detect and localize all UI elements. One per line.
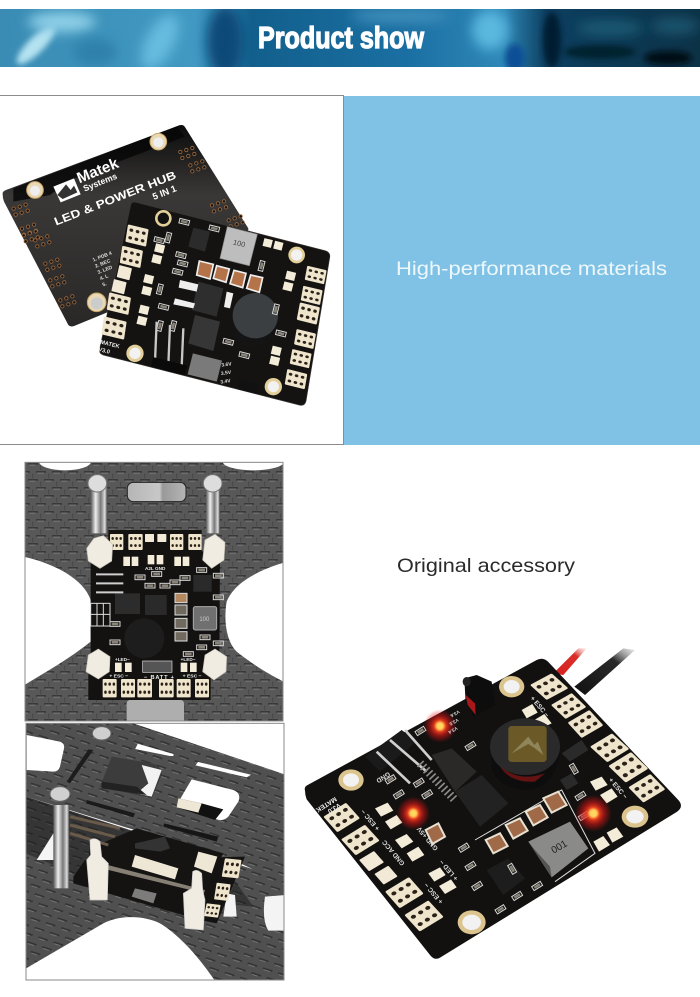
small resistors [110,568,223,656]
screws [50,787,70,801]
small resistors [154,218,286,359]
steel rod [53,805,69,888]
buzzer [233,293,278,346]
solder pads: lower left edge [323,803,444,932]
feature list: 2. BEC [94,258,112,270]
led label right: +LED− [181,657,196,662]
12v label: A2L GND [145,566,166,571]
esc label left: + ESC − [109,674,128,680]
header banner [0,9,700,67]
board version label: MATEK [314,795,338,813]
upper plate windows [27,735,64,772]
white background [26,723,284,980]
feature list: 4. L [99,273,109,282]
front board [98,202,330,405]
lower plate windows [36,834,54,860]
caption: original accessory: Original accessory [397,555,575,577]
voltage labels: V3.4 [447,726,458,735]
carbon frame [23,453,285,723]
panel frame lines [0,95,344,445]
voltage resistors [188,353,222,382]
board [305,659,681,959]
label esc left: + ESC − [360,808,382,832]
battery diode [143,661,172,672]
power hub board [88,530,223,700]
regulators [188,228,210,252]
inductor [528,822,588,877]
inductor [193,607,217,630]
esc label right: + ESC − [183,674,202,680]
lower carbon plate [26,797,287,983]
small resistors [385,726,589,914]
brand subtext: Systems [82,171,119,194]
label gnd: GND [375,770,391,784]
board labels: MATEK [99,340,121,350]
photo: lit power hub board [305,648,681,959]
voltage labels: 3.6V [221,361,233,369]
switch [237,379,259,394]
board labels: V3.0 [98,347,110,356]
buzzer [490,718,560,790]
mid pads [123,557,130,566]
gold pads [222,858,242,878]
top pads [110,534,123,550]
capacitors [197,261,213,279]
buzzer [124,618,164,658]
left solder pads [125,224,149,247]
watermark logo [508,726,547,762]
bottom pads [103,679,117,697]
upper PCB [88,828,224,860]
steel standoff rods [88,475,222,533]
mounting holes [338,676,648,934]
label esc lower: + ESC − [423,881,445,905]
status LEDs [397,709,612,832]
photo: two power hub boards [3,125,330,405]
feature list: 3. LED [97,265,114,276]
voltage labels: V3.6 [449,709,460,718]
upper carbon plate [26,723,287,885]
chips [115,593,140,614]
label led lower: + LED − [438,858,460,882]
pin header [155,322,183,367]
voltage labels: 3.5V [221,370,232,377]
voltage labels: 3.4V [220,378,232,386]
chip [135,837,170,852]
blue text panel [344,96,700,445]
board labels: − BATT + [144,675,175,681]
logo mark [53,178,81,202]
feature list: 1. PDB 4 [92,250,113,264]
inductor marking: 100 [232,238,246,249]
solder pads: upper right edge [530,673,665,803]
brand text: Matek [74,155,122,187]
board version label: V3.0 [326,801,342,815]
slots [86,800,135,817]
label esc right: + ESC − [607,777,628,801]
frame border [26,723,284,980]
pads [154,243,165,254]
pin header [365,730,455,800]
watermark mountains [512,737,543,755]
chips [432,740,588,895]
mounting holes [155,210,172,227]
voltage labels: V3.5 [448,717,459,727]
resistor strip [132,888,157,903]
product name: LED & POWER HUB [53,170,178,228]
photo: board mounted on carbon frame, top view [23,453,285,723]
feature list: 5. [102,281,108,288]
small pads [375,704,623,894]
lower PCB [73,857,245,923]
resistor block [91,603,110,626]
capacitors [426,792,567,853]
banner title: Product show [258,20,425,55]
battery wires [553,648,635,695]
banner background [0,9,700,67]
capacitors [175,593,187,603]
pin header [96,574,123,592]
product subtitle: 5 IN 1 [151,183,178,202]
nylon standoffs [86,534,227,680]
power switch [463,675,495,717]
nylon standoffs [87,839,108,900]
small board in window [177,798,223,820]
pin headers [70,817,120,845]
led label left: +LED− [115,657,130,662]
silkscreen outlines [475,790,595,882]
frame border [25,462,283,721]
connectors [132,855,178,879]
panel: high-performance materials [0,95,700,445]
inductor [220,227,257,266]
lower plate shadow [26,797,253,907]
label gnd acc: GND ACC [381,838,407,867]
right solder pads [305,266,327,284]
label esc upper: + ESC − [528,695,550,719]
photo: board stacked between frame plates [26,723,287,983]
inductor marking: 100 [199,617,210,623]
caption: high-performance materials: High-performance materials [396,259,667,280]
inductor marking: 001 [550,838,570,856]
label gnd 12v: GND +5V [416,825,440,852]
back board [3,125,248,327]
